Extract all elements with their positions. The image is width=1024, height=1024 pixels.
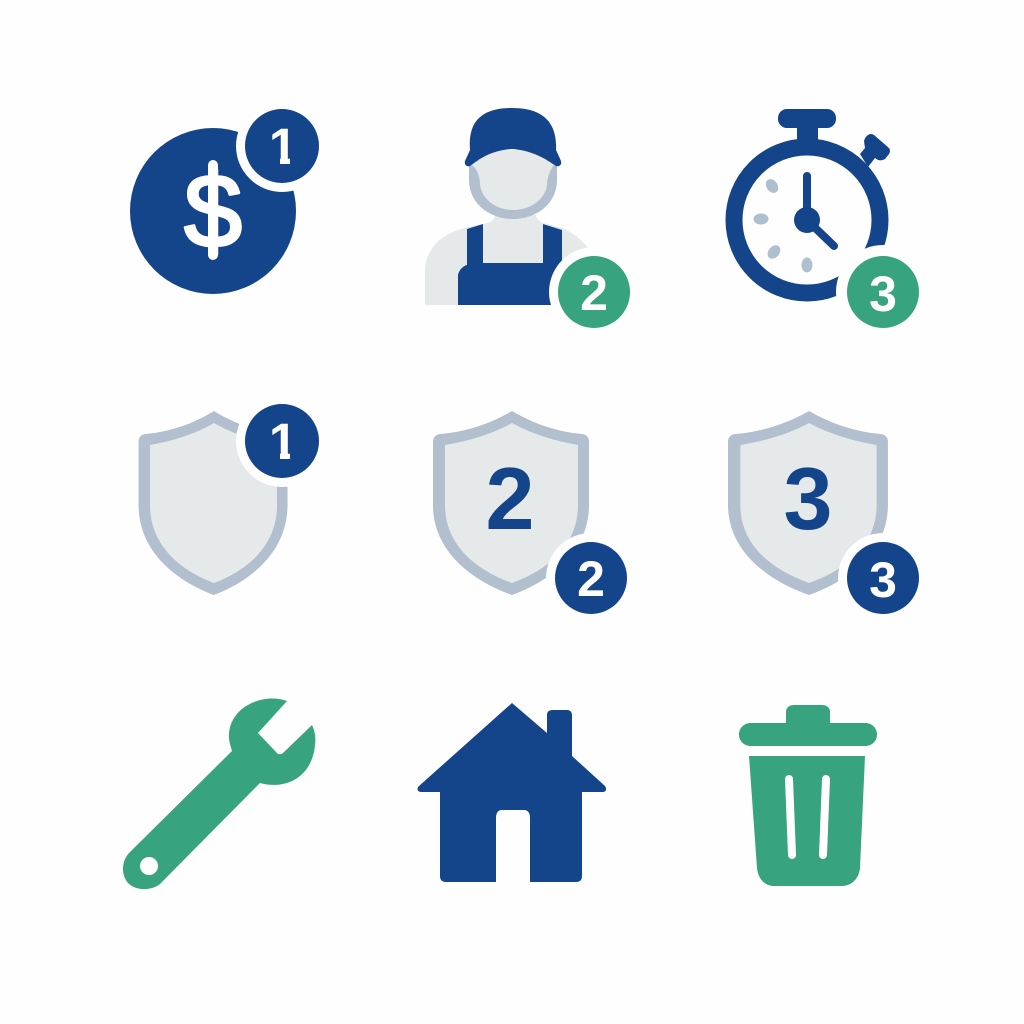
icon: worker with badge 2: 2	[580, 265, 608, 321]
icon: shield 3 with badge 3: 3	[869, 552, 897, 608]
icon: trash can	[739, 705, 877, 886]
icon: wrench	[123, 698, 315, 889]
icon: worker with badge 2	[425, 108, 639, 337]
icon: stopwatch with badge 3	[734, 109, 930, 339]
icon: house	[418, 703, 606, 882]
icon: dollar coin with badge 1: 1	[269, 118, 297, 175]
icon: blank shield with badge 1	[139, 395, 328, 595]
icon: shield 2 with badge 2: 2	[486, 449, 534, 548]
icon: shield 3 with badge 3	[728, 411, 928, 623]
icon: shield 3 with badge 3: 3	[784, 449, 832, 548]
icon: stopwatch with badge 3: 3	[869, 266, 897, 322]
icon: dollar coin with badge 1: $	[184, 154, 242, 270]
icon: dollar coin with badge 1	[130, 100, 328, 294]
icon: shield 2 with badge 2: 2	[577, 551, 605, 607]
icon: shield 2 with badge 2	[433, 411, 636, 623]
icon: blank shield with badge 1: 1	[269, 413, 297, 470]
